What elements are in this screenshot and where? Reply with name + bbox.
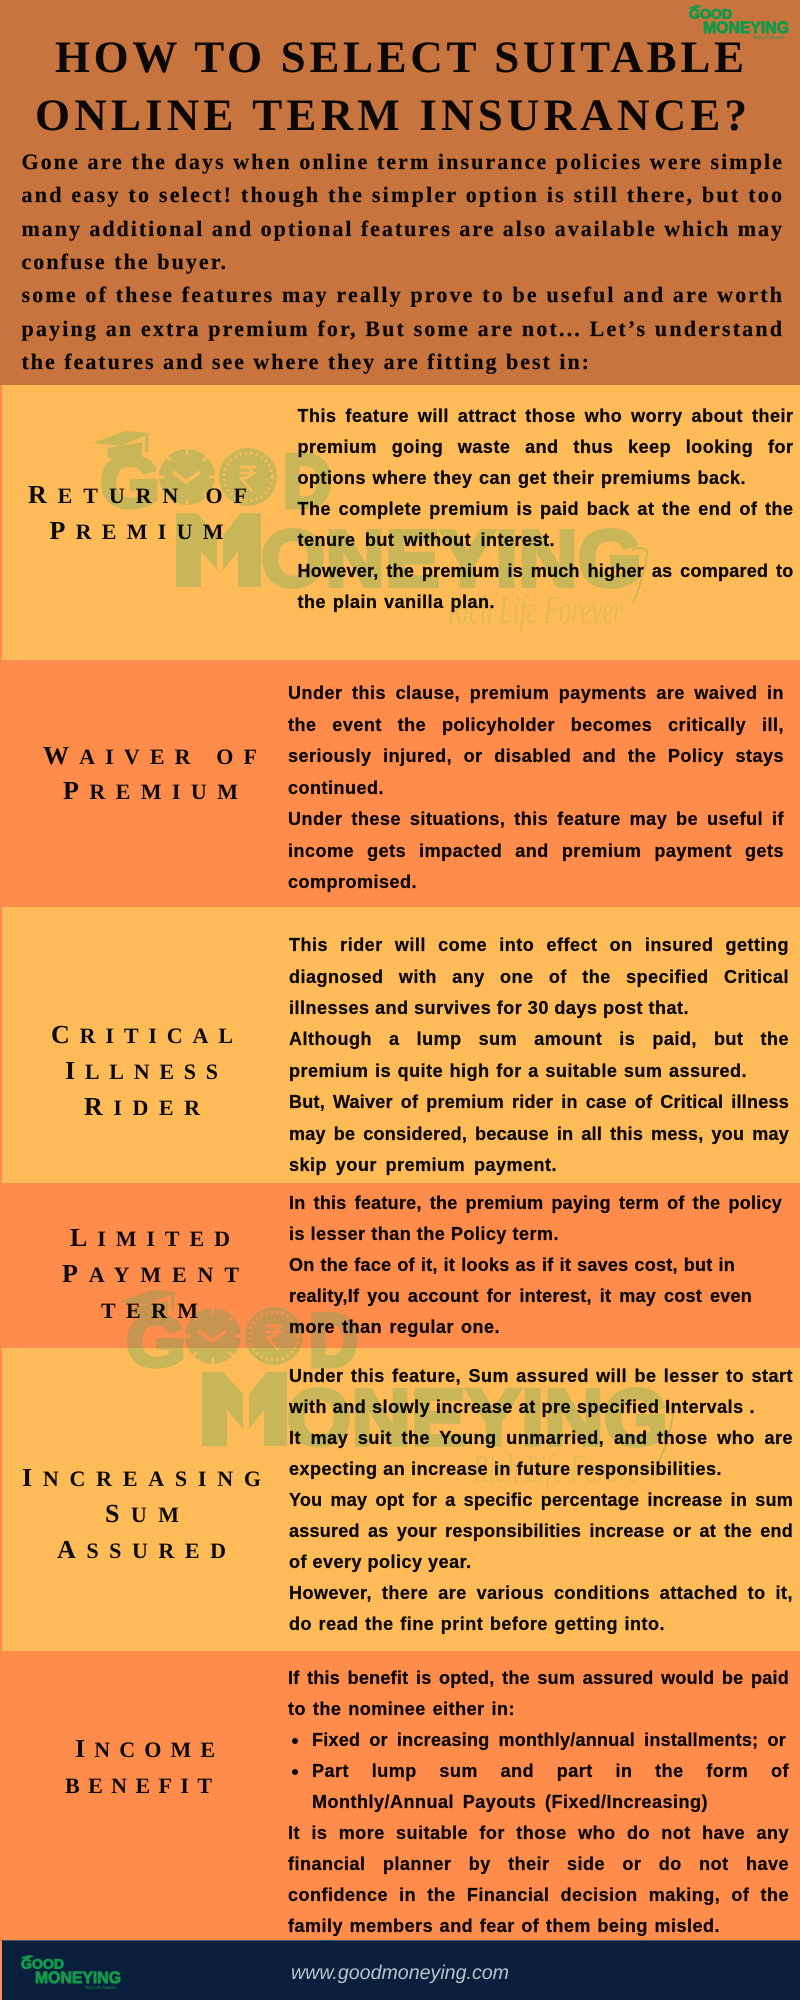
panel: waiver of premium <box>0 660 800 907</box>
intro paragraph: the features and see where they are fitting best in: <box>22 349 589 374</box>
intro paragraph <box>22 149 782 374</box>
text: increasing sum assured: of every policy year. <box>289 1552 472 1572</box>
intro paragraph: Gone are the days when online term insurance policies were simple <box>22 149 782 174</box>
heading: waiver of premium: P REMIUM <box>63 776 238 805</box>
watermark: Good Moneying logo, first: Rich Life Forever <box>446 587 623 632</box>
panel: critical illness rider <box>0 907 800 1183</box>
heading: limited payment term: TERM <box>101 1298 198 1323</box>
text: critical illness rider: skip your premium payment. <box>289 1155 557 1175</box>
text: income benefit: to the nominee either in: <box>288 1699 515 1719</box>
text: increasing sum assured: You may opt for a specific percentage increase in sum <box>289 1490 793 1510</box>
watermark: Good Moneying logo, second: Rich Life Forever <box>472 1446 649 1491</box>
heading: critical illness rider: R IDER <box>84 1092 201 1121</box>
logo: Good Moneying footer: Rich Life Forever <box>85 1985 116 1991</box>
text: critical illness rider <box>289 935 789 1176</box>
text: income benefit: If this benefit is opted, the sum assured would be paid <box>288 1668 789 1688</box>
text: income benefit: It is more suitable for those who do not have any <box>288 1823 789 1843</box>
text: limited payment term: reality,If you account for interest, it may cost even <box>289 1286 752 1306</box>
text: critical illness rider: may be considered, because in all this mess, you may <box>289 1124 789 1144</box>
intro paragraph: some of these features may really prove to be useful and are worth <box>22 282 782 307</box>
text: income benefit <box>288 1668 789 1936</box>
text: limited payment term: is lesser than the Policy term. <box>289 1224 559 1244</box>
watermark: Good Moneying logo, first: D <box>283 439 332 523</box>
watermark: Good Moneying logo, first <box>93 431 647 632</box>
heading: return of premium: P REMIUM <box>50 516 224 545</box>
text: return of premium: tenure but without interest. <box>298 530 555 550</box>
text: income benefit: family members and fear of them being misled. <box>288 1916 720 1936</box>
text: critical illness rider: illnesses and survives for 30 days post that. <box>289 998 689 1018</box>
heading: limited payment term: P AYMENT <box>62 1259 239 1288</box>
text: critical illness rider: premium is quite high for a suitable sum assured. <box>289 1061 747 1081</box>
text: increasing sum assured: However, there are various conditions attached to it, <box>289 1583 793 1603</box>
heading: income benefit: BENEFIT <box>65 1773 212 1798</box>
text: waiver of premium: continued. <box>288 778 384 798</box>
watermark: Good Moneying logo, second <box>119 1290 673 1491</box>
logo: Good Moneying top right <box>688 5 789 41</box>
intro paragraph: confuse the buyer. <box>22 249 226 274</box>
panel: return of premium <box>0 385 800 660</box>
text: return of premium: However, the premium is much higher as compared to <box>298 561 794 581</box>
text: return of premium: This feature will attract those who worry about their <box>298 406 794 426</box>
logo: Good Moneying top right: Rich Life Forever <box>753 35 784 41</box>
text: limited payment term: On the face of it, it looks as if it saves cost, but in <box>289 1255 735 1275</box>
bullet two <box>292 1769 298 1775</box>
heading: income benefit: I NCOME <box>75 1734 215 1763</box>
text: increasing sum assured: It may suit the Young unmarried, and those who are <box>289 1428 793 1448</box>
website url: www.goodmoneying.com <box>291 1962 509 1984</box>
watermark: Good Moneying logo, first: ONEYING <box>261 514 642 603</box>
text: waiver of premium <box>288 683 784 892</box>
text: waiver of premium: Under this clause, premium payments are waived in <box>288 683 784 703</box>
heading: increasing sum assured: I NCREASING <box>22 1463 261 1492</box>
text: limited payment term <box>289 1193 782 1338</box>
heading: critical illness rider <box>51 1020 233 1121</box>
text: waiver of premium: compromised. <box>288 872 417 892</box>
text: increasing sum assured: expecting an increase in future responsibilities. <box>289 1459 722 1479</box>
logo: Good Moneying footer: MONEYING <box>35 1969 121 1987</box>
text: income benefit: Monthly/Annual Payouts (Fixed/Increasing) <box>312 1792 708 1812</box>
heading: limited payment term <box>62 1223 239 1323</box>
heading: return of premium <box>28 480 247 545</box>
logo: Good Moneying footer <box>20 1955 121 1991</box>
heading: limited payment term: L IMITED <box>70 1223 230 1252</box>
text: increasing sum assured: with and slowly increase at pre specified Intervals . <box>289 1397 755 1417</box>
text: waiver of premium: seriously injured, or disabled and the Policy stays <box>288 746 784 766</box>
title: HOW TO SELECT SUITABLE <box>55 32 744 82</box>
panel: income benefit <box>0 1651 800 1940</box>
watermark: Good Moneying logo, first: G <box>100 443 160 523</box>
heading: income benefit <box>65 1734 215 1798</box>
text: limited payment term: more than regular one. <box>289 1317 500 1337</box>
text: critical illness rider: This rider will come into effect on insured getting <box>289 935 789 955</box>
text: income benefit: Fixed or increasing monthly/annual installments; or <box>312 1730 786 1750</box>
text: return of premium: options where they can get their premiums back. <box>298 468 746 488</box>
intro paragraph: many additional and optional features are also available which may <box>22 216 782 241</box>
watermark logos <box>93 431 674 1490</box>
text: return of premium: The complete premium is paid back at the end of the <box>298 499 794 519</box>
text: limited payment term: In this feature, the premium paying term of the policy <box>289 1193 782 1213</box>
title: ONLINE TERM INSURANCE? <box>35 90 747 140</box>
text: critical illness rider: Although a lump sum amount is paid, but the <box>289 1029 789 1049</box>
text: income benefit: financial planner by their side or do not have <box>288 1854 789 1874</box>
text: waiver of premium: income gets impacted and premium payment gets <box>288 841 784 861</box>
intro paragraph: paying an extra premium for, But some are not... Let’s understand <box>22 316 782 341</box>
text: critical illness rider: diagnosed with any one of the specified Critical <box>289 967 789 987</box>
text: increasing sum assured: assured as your responsibilities increase or at the end <box>289 1521 793 1541</box>
heading: waiver of premium: W AIVER OF <box>43 741 257 770</box>
heading: waiver of premium <box>43 741 257 805</box>
heading: critical illness rider: I LLNESS <box>65 1056 218 1085</box>
heading: return of premium: R ETURN OF <box>28 480 247 509</box>
bullet one <box>292 1738 298 1744</box>
title <box>35 32 747 140</box>
text: waiver of premium: the event the policyholder becomes critically ill, <box>288 715 784 735</box>
panel: limited payment term <box>0 1183 800 1348</box>
heading: increasing sum assured <box>22 1463 261 1564</box>
heading: increasing sum assured: S UM <box>105 1499 179 1528</box>
text: increasing sum assured: do read the fine print before getting into. <box>289 1614 665 1634</box>
text: income benefit: Part lump sum and part in the form of <box>312 1761 789 1781</box>
text: income benefit: confidence in the Financial decision making, of the <box>288 1885 789 1905</box>
text: return of premium: the plain vanilla plan. <box>298 592 495 612</box>
text: critical illness rider: But, Waiver of premium rider in case of Critical illness <box>289 1092 789 1112</box>
text: waiver of premium: Under these situations, this feature may be useful if <box>288 809 784 829</box>
logo: Good Moneying footer: GOOD <box>21 1956 64 1972</box>
watermark: Good Moneying logo, second: D <box>309 1298 358 1382</box>
heading: increasing sum assured: A SSURED <box>57 1535 226 1564</box>
heading: critical illness rider: C RITICAL <box>51 1020 233 1049</box>
text: return of premium <box>298 406 794 612</box>
logo: Good Moneying top right: MONEYING <box>703 19 789 37</box>
footer bar <box>0 1940 800 2000</box>
header panel <box>0 0 800 385</box>
text: increasing sum assured <box>288 1366 793 1634</box>
watermark: Good Moneying logo, second: ONEYING <box>287 1373 668 1462</box>
intro paragraph: and easy to select! though the simpler option is still there, but too <box>22 182 782 207</box>
panel: increasing sum assured <box>0 1348 800 1651</box>
text: return of premium: premium going waste and thus keep looking for <box>298 437 794 457</box>
watermark: Good Moneying logo, second: G <box>126 1302 186 1382</box>
text: increasing sum assured: Under this feature, Sum assured will be lesser to start <box>289 1366 793 1386</box>
logo: Good Moneying top right: GOOD <box>689 6 732 22</box>
